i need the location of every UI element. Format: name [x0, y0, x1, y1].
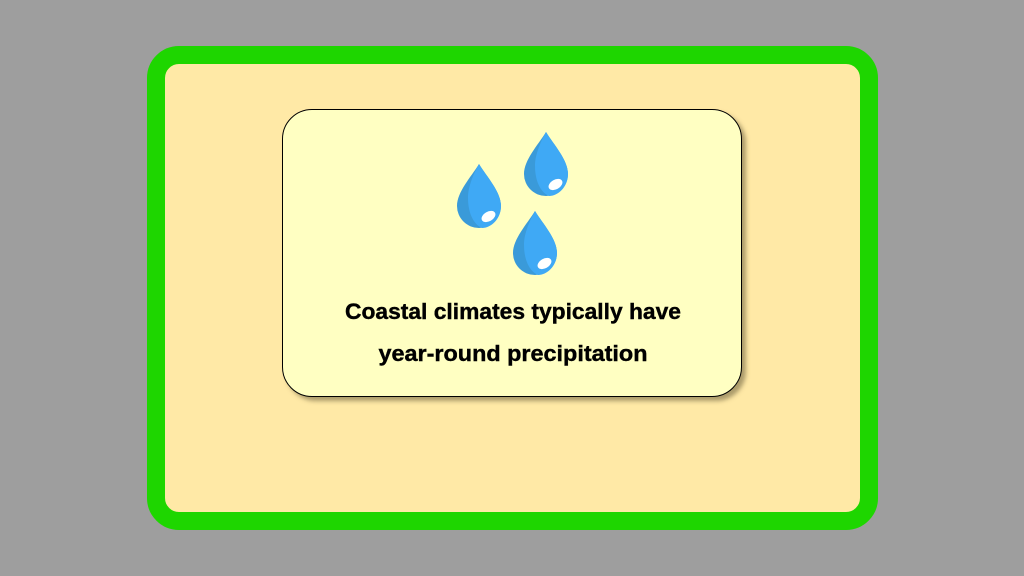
caption line 2: year-round precipitation — [378, 341, 648, 366]
caption line 1: Coastal climates typically have — [345, 299, 681, 324]
icon: water drop left — [457, 164, 501, 228]
text block: caption — [345, 299, 681, 366]
panel: message card — [282, 109, 742, 397]
icon: water drop right — [524, 132, 568, 196]
panel: green-framed background — [147, 46, 878, 530]
icon: water drop bottom — [513, 211, 557, 275]
